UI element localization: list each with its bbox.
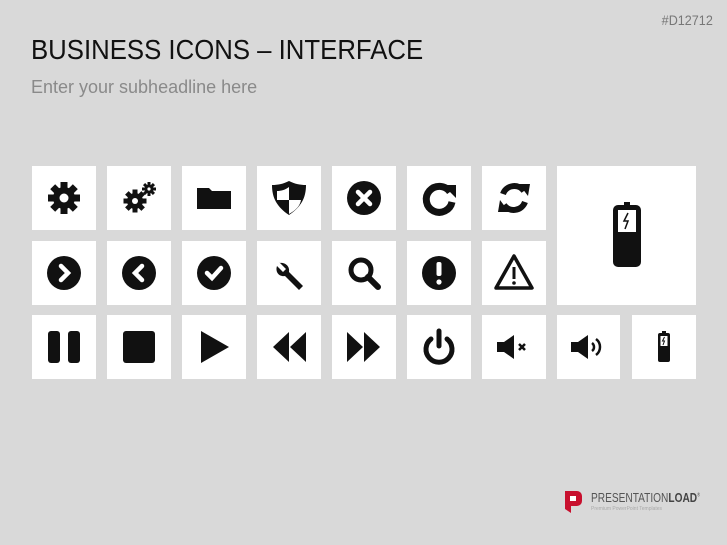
icon: rewind: [257, 315, 321, 379]
icon: play: [182, 315, 246, 379]
icon: gears: [107, 166, 171, 230]
icon: battery small: [632, 315, 696, 379]
icon: wrench: [257, 241, 321, 305]
title: BUSINESS ICONS – INTERFACE: [31, 34, 423, 65]
icon: volume: [557, 315, 620, 379]
icon: battery large: [557, 166, 696, 305]
icon: pause: [32, 315, 96, 379]
icon grid: [32, 166, 696, 379]
icon: gear: [32, 166, 96, 230]
icon: alert circle: [407, 241, 471, 305]
icon: fast forward: [332, 315, 396, 379]
icon: magnifier: [332, 241, 396, 305]
icon: close circle: [332, 166, 396, 230]
code label: #D12712: [662, 12, 713, 28]
logo: presentationload: PRESENTATIONLOAD®: [591, 490, 700, 505]
icon: shield: [257, 166, 321, 230]
icon: power: [407, 315, 471, 379]
icon: folder: [182, 166, 246, 230]
subheadline: Enter your subheadline here: [31, 77, 257, 97]
icon: sync: [482, 166, 546, 230]
icon: arrow right circle: [32, 241, 96, 305]
icon: refresh: [407, 166, 471, 230]
icon: mute: [482, 315, 546, 379]
icon: arrow left circle: [107, 241, 171, 305]
icon: stop: [107, 315, 171, 379]
icon: warning triangle: [482, 241, 546, 305]
logo: presentationload: Premium PowerPoint Templates: [591, 506, 662, 512]
logo: presentationload: [565, 490, 700, 513]
icon: check circle: [182, 241, 246, 305]
